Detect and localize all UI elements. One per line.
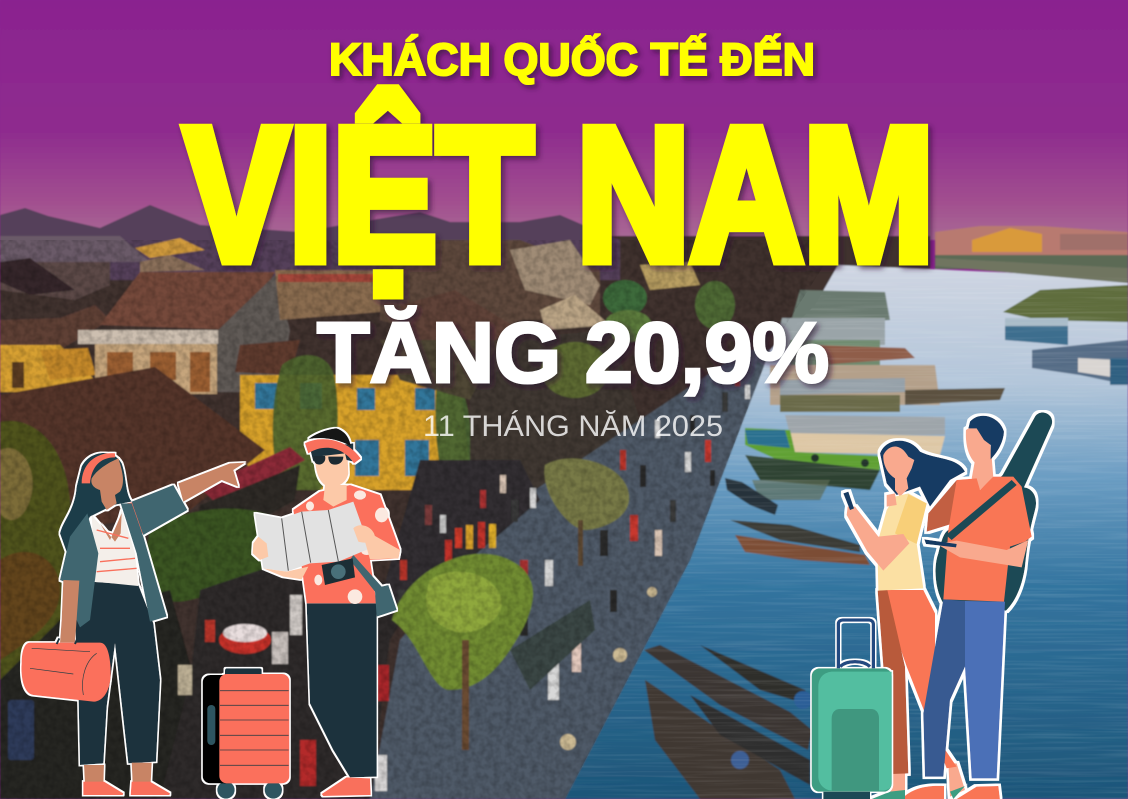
shoes (83, 782, 170, 795)
lighter front (818, 672, 892, 791)
map (255, 502, 370, 572)
guitar (936, 413, 1052, 611)
man phone (924, 539, 957, 547)
title line: KHÁCH QUỐC TẾ ĐẾN: KHÁCH QUỐC TẾ ĐẾN (329, 34, 815, 85)
reeds and houseboats on far bank (1003, 285, 1128, 385)
land base (0, 236, 930, 799)
woman arm and phone (847, 507, 909, 571)
sunglasses (313, 456, 343, 465)
trees on promenade (392, 458, 629, 750)
headband (82, 453, 115, 483)
shirt (293, 485, 400, 603)
shoes (322, 777, 371, 796)
bag strap (127, 502, 143, 535)
bag on hip (350, 555, 397, 617)
striped shirt (92, 510, 138, 586)
face and neck (91, 458, 123, 510)
wheel base (823, 792, 870, 799)
illustration: woman tourist pointing with duffel bag (21, 453, 245, 795)
main heading: VIỆT NAM: VIỆT NAM (184, 89, 934, 301)
crowded street (160, 370, 750, 799)
wheels (217, 781, 235, 799)
man shirt (943, 477, 1032, 602)
statistic: TĂNG 20,9%: TĂNG 20,9% (317, 306, 829, 401)
foliage on left side (0, 421, 290, 799)
woman hair (880, 441, 965, 507)
front pocket (832, 709, 879, 791)
woman face and neck (883, 446, 914, 497)
purple sky (0, 0, 1128, 240)
man sleeve and back arm (927, 480, 957, 532)
river water (565, 265, 1128, 799)
strap (946, 480, 1017, 540)
ripples on water (565, 265, 1128, 799)
legs (84, 763, 152, 785)
big foreground roof and awning (0, 367, 305, 540)
small wooden boats (644, 478, 870, 799)
telescopic handle (838, 620, 873, 668)
shoes (902, 786, 1000, 799)
promenade (370, 350, 770, 799)
case body (812, 668, 892, 792)
handle (225, 668, 262, 678)
forearm (263, 567, 308, 579)
trousers (307, 603, 377, 777)
period: 11 THÁNG NĂM 2025: 11 THÁNG NĂM 2025 (423, 410, 723, 443)
woman shirt (877, 493, 927, 591)
hands (253, 525, 375, 560)
distant skyline (0, 205, 1128, 280)
man jeans (923, 599, 965, 777)
hair (60, 453, 132, 557)
hat (305, 439, 361, 463)
far river bank (935, 258, 1128, 283)
centre roofs and yellow house (240, 240, 735, 500)
man neck and face (972, 457, 993, 490)
woman sleeve (895, 494, 927, 544)
illustration: green suitcase (812, 620, 892, 799)
man hair (968, 416, 1004, 459)
hanging forearm (60, 580, 79, 643)
teal jacket (60, 503, 167, 627)
duffel bag (21, 643, 111, 702)
illustration: couple with guitar (843, 413, 1052, 799)
woman trousers (880, 590, 957, 768)
back shell (203, 675, 236, 783)
camera (322, 558, 355, 585)
illustration: coral hard-shell suitcase (203, 668, 289, 799)
hair (310, 443, 353, 462)
left town roofs (0, 238, 380, 394)
pointing arm (178, 463, 245, 502)
photo grain over town (0, 228, 840, 799)
front shell (219, 674, 289, 783)
illustration: man tourist reading a map (253, 428, 400, 796)
trousers (75, 582, 160, 765)
woman legs (890, 763, 965, 797)
moored tourist boats (745, 290, 1005, 500)
neck and face (323, 485, 347, 507)
man arm (937, 540, 1028, 567)
bag handles (57, 638, 77, 644)
